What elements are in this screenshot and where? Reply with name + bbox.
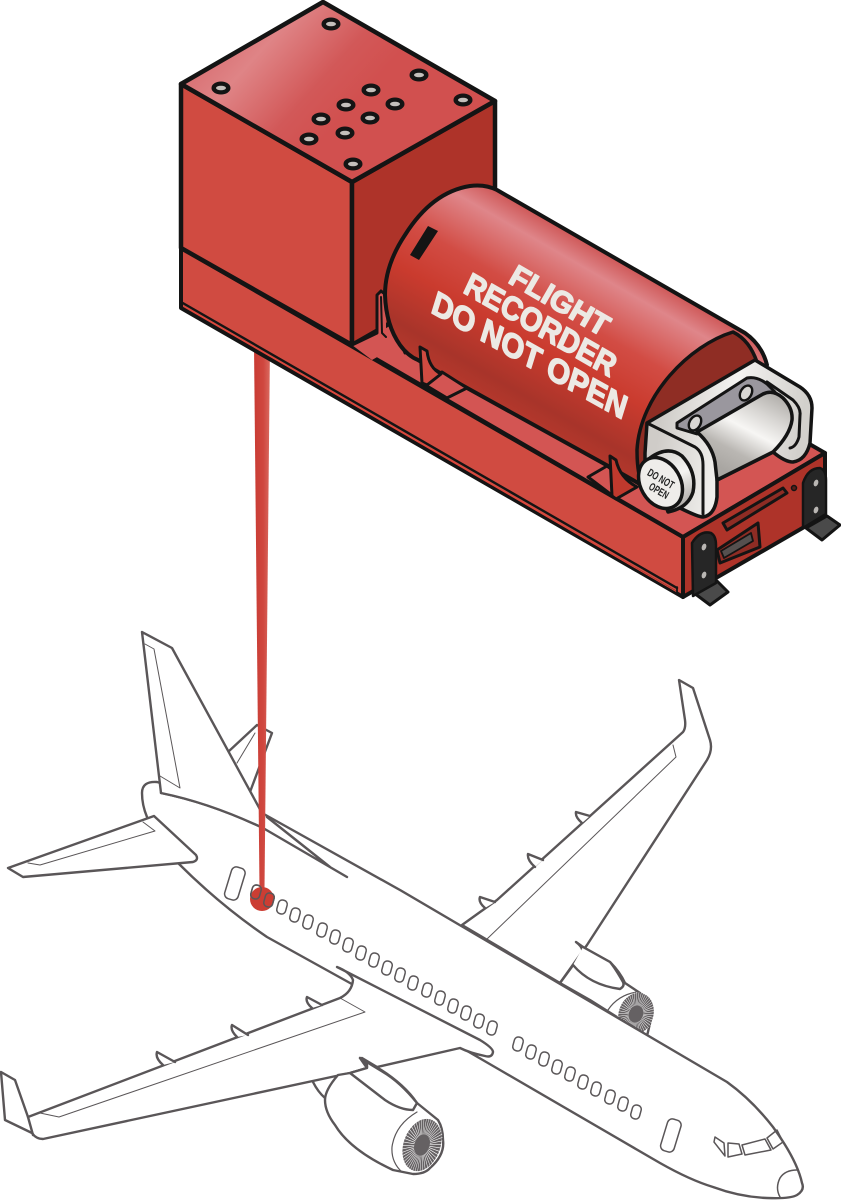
box right face [352, 101, 495, 345]
windows row two [512, 1036, 642, 1120]
base top [352, 263, 825, 537]
doors [223, 866, 682, 1153]
base end face [683, 453, 825, 597]
mounting holes [212, 18, 472, 170]
flight recorder illustration [181, 2, 840, 605]
mounting foot right [806, 516, 840, 540]
bracket right [803, 468, 826, 528]
connector port [717, 523, 760, 563]
near engine [325, 1058, 449, 1178]
windows row one [250, 884, 498, 1036]
mounting foot left [694, 581, 728, 605]
FLIGHT: FLIGHT [504, 259, 615, 343]
handle bracket [645, 360, 812, 517]
cylinder end face [637, 332, 757, 482]
middle cradle [420, 347, 467, 398]
left lug edge [647, 423, 703, 514]
cylinder body [385, 186, 767, 487]
black label mark [410, 226, 438, 260]
pin cap [630, 450, 691, 516]
near wing [1, 967, 493, 1139]
location dot [250, 887, 274, 911]
box left face [181, 84, 352, 345]
cap text [645, 467, 676, 502]
front cradle [588, 456, 637, 499]
roller [697, 392, 792, 480]
RECORDER: RECORDER [459, 266, 622, 384]
DO NOT OPEN: DO NOT OPEN [428, 284, 632, 427]
bracket left [692, 532, 716, 596]
base side [181, 248, 683, 597]
far engine [560, 942, 661, 1041]
tail fin [142, 632, 263, 828]
fuselage lines near tail [161, 793, 347, 877]
cockpit windows [714, 1130, 783, 1157]
airplane illustration [1, 632, 803, 1198]
status light [792, 486, 796, 490]
laser line from recorder to aircraft [250, 345, 275, 911]
cap text: DO NOT [645, 467, 676, 492]
cap text: OPEN [646, 481, 671, 502]
grey plate [677, 378, 775, 434]
far tailplane [228, 725, 272, 792]
cylinder text [428, 259, 632, 427]
pin barrel [650, 451, 694, 512]
rear cradle [352, 291, 405, 360]
fuselage [142, 782, 803, 1198]
near tailplane [8, 816, 197, 877]
box top face [181, 2, 495, 182]
nose radome [778, 1170, 797, 1197]
right lug inner edge [767, 382, 800, 448]
connector slot [723, 488, 787, 530]
far wing [462, 680, 711, 983]
